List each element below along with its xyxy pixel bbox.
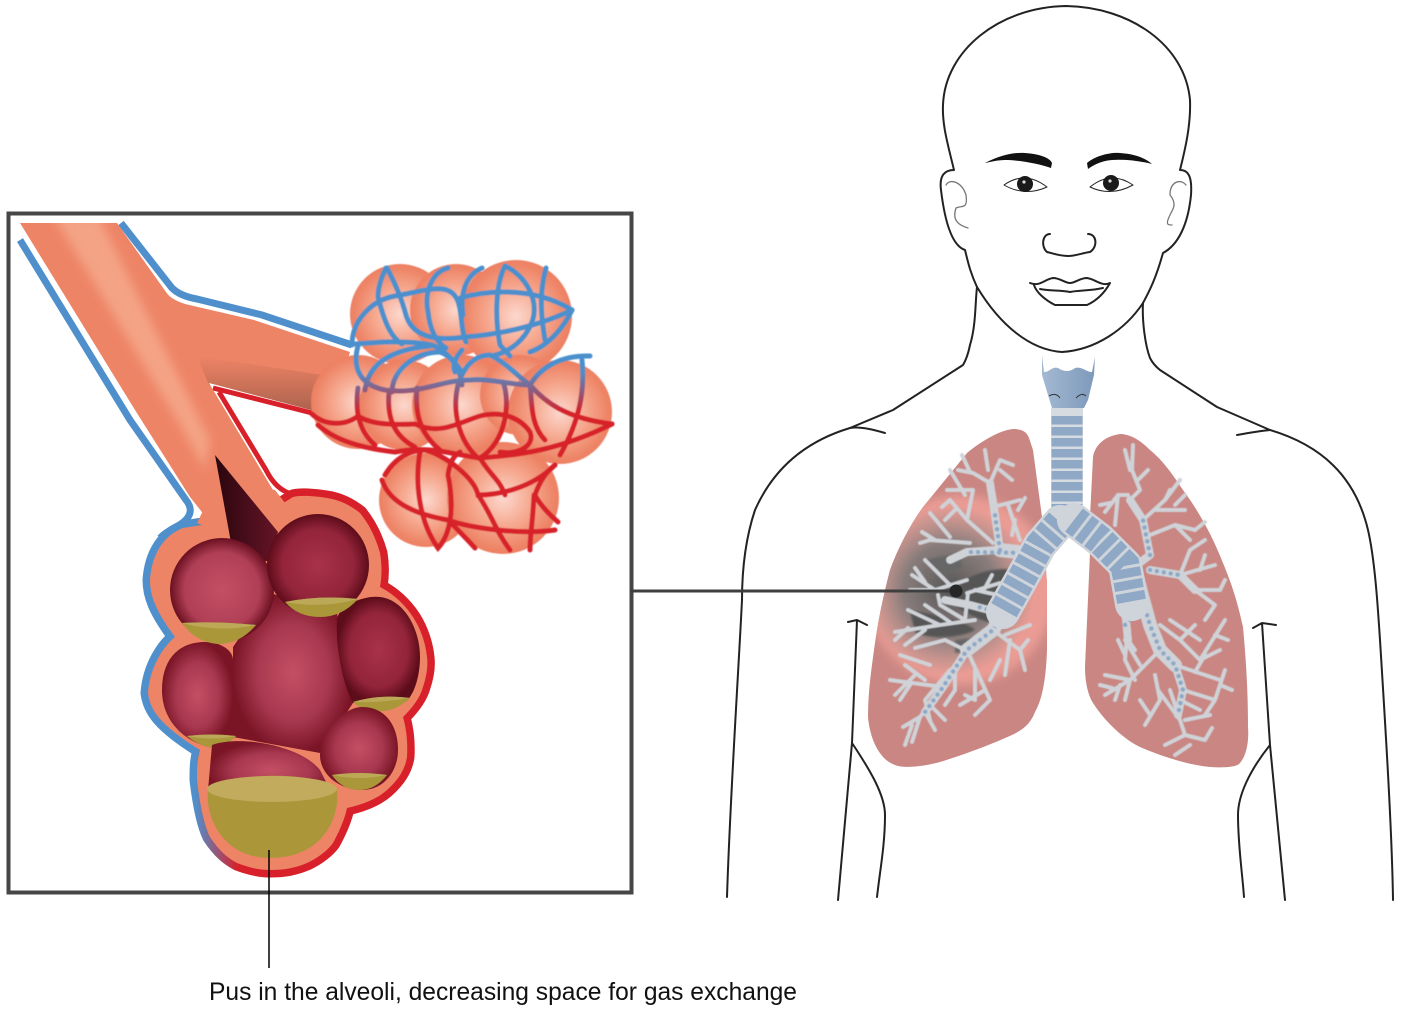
bronchial tree: right lung xyxy=(1100,445,1232,755)
bottom chamber with pus pool xyxy=(207,741,337,858)
sac wall xyxy=(148,496,427,870)
healthy alveoli cluster xyxy=(311,260,612,554)
larynx xyxy=(1042,355,1095,408)
human figure outline xyxy=(727,6,1393,900)
upper left chamber xyxy=(170,538,274,644)
right inner arm and torso xyxy=(1238,623,1285,900)
bronchiole tube xyxy=(20,215,352,538)
right chamber xyxy=(337,597,420,711)
central cavity xyxy=(233,593,353,753)
head and jaw xyxy=(941,6,1191,352)
left eyebrow xyxy=(985,153,1052,168)
capillary network xyxy=(312,266,612,550)
tube mouth into sac xyxy=(197,480,292,540)
callout dot on infected lung xyxy=(950,584,962,598)
left inner arm and torso xyxy=(838,620,885,900)
right ear inner xyxy=(1167,182,1186,225)
alveolar sacs xyxy=(311,260,612,554)
trachea xyxy=(1051,408,1083,518)
left ear inner xyxy=(946,182,968,228)
bronchial tree: left lung xyxy=(890,450,1030,745)
neck and shoulders xyxy=(727,287,977,897)
upper right chamber xyxy=(267,514,369,617)
connector line from inset to lung xyxy=(630,590,955,592)
infected alveolar sac xyxy=(148,455,427,870)
left chamber xyxy=(162,642,236,748)
dark lumen wedge xyxy=(215,455,278,570)
mouth xyxy=(1030,278,1110,305)
nose xyxy=(1043,234,1095,256)
lower right chamber xyxy=(320,707,398,790)
bronchi xyxy=(1003,510,1132,612)
left lung with infection xyxy=(865,429,1055,767)
right eyebrow xyxy=(1087,153,1152,169)
inset frame xyxy=(8,214,632,892)
caption: Pus in the alveoli, decreasing space for gas exchange xyxy=(209,978,797,1006)
pointer line to pus xyxy=(268,850,270,968)
left eye xyxy=(1004,176,1047,192)
right lung xyxy=(1085,434,1248,767)
right eye xyxy=(1090,175,1133,192)
